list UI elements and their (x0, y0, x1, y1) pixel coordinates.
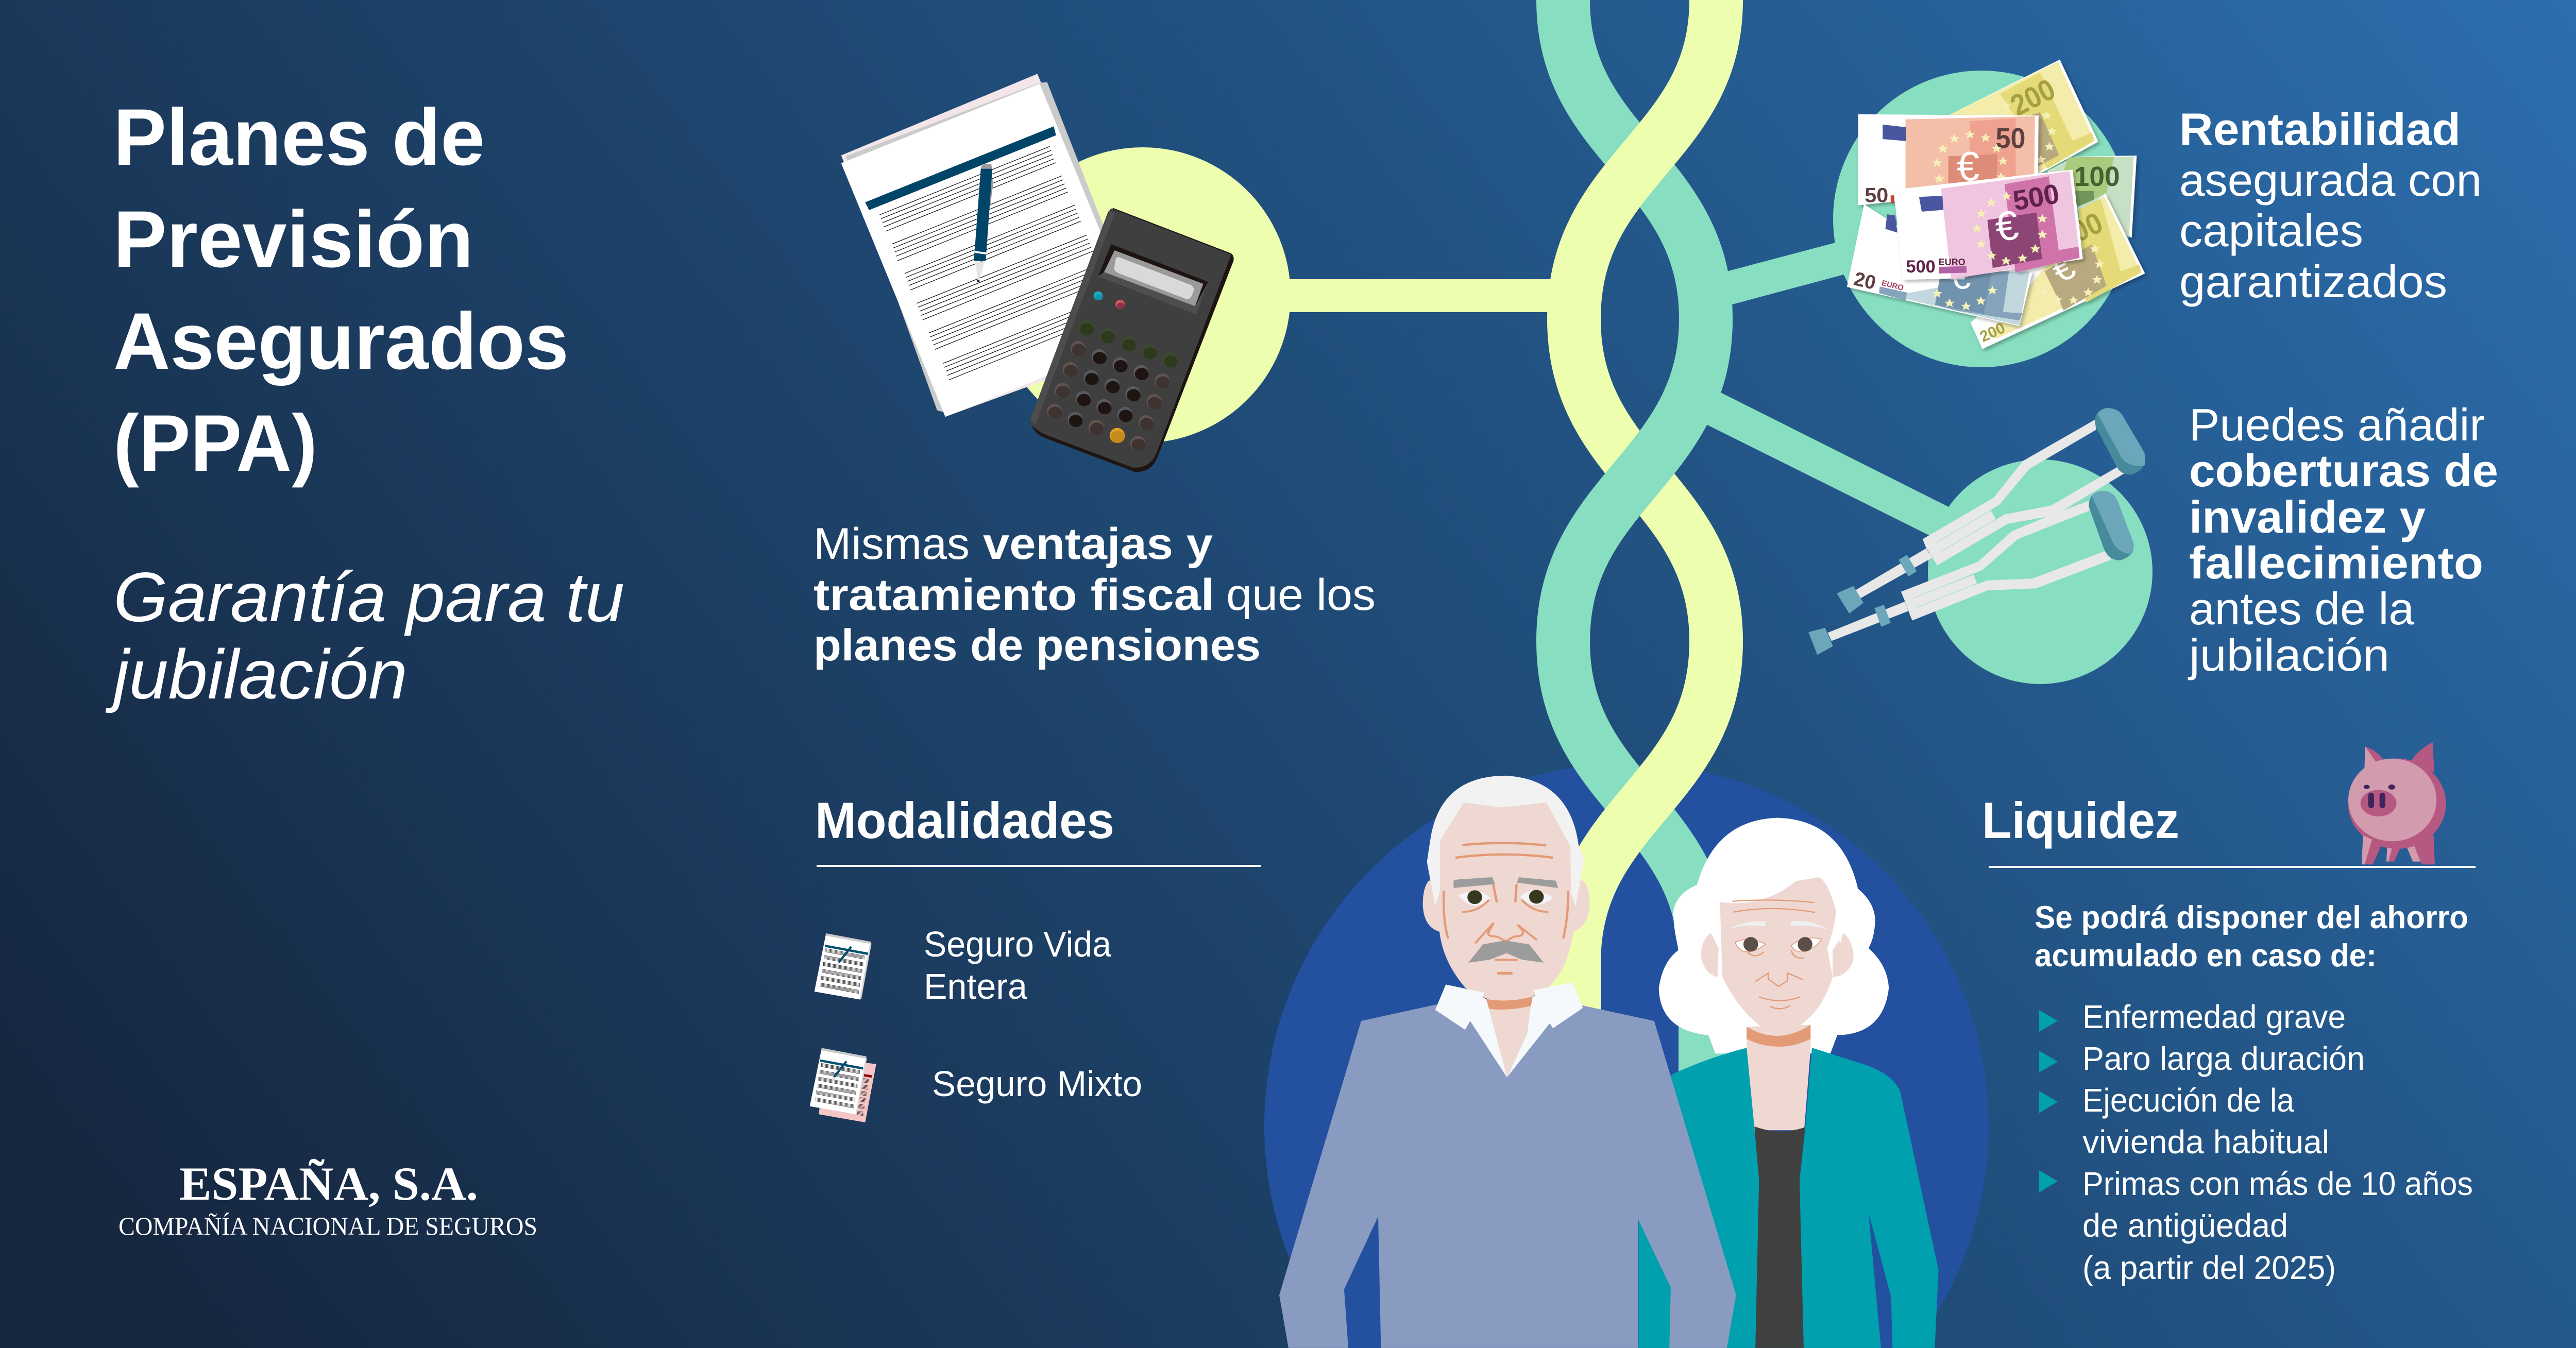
banknote 500: EURO (1939, 257, 1965, 267)
banknote 20: 20 (1852, 268, 1878, 294)
text block: ventajas fiscales: Mismas (814, 519, 970, 569)
text block: rentabilidad: Rentabilidad (2179, 104, 2461, 155)
banknote 100 (2047, 156, 2137, 238)
helix ribbons (1563, 0, 1716, 1185)
woman (1638, 818, 1939, 1348)
text block: ventajas fiscales: tratamiento fiscal (814, 570, 1214, 620)
text block: condiciones liquidez (2035, 900, 2468, 974)
banknote 100: 100 (2074, 161, 2120, 192)
list: causas de liquidez: Ejecución de la (2082, 1082, 2294, 1119)
text block: rentabilidad: garantizados (2179, 256, 2447, 307)
label: seguro mixto: Seguro Mixto (932, 1064, 1142, 1104)
banknote 50: 50 (1865, 184, 1888, 207)
text block: condiciones liquidez: acumulado en caso de: (2035, 938, 2377, 974)
subtitle: Garantía para tu (113, 558, 624, 636)
list: causas de liquidez: vivienda habitual (2082, 1123, 2329, 1161)
banknote 200 front: € (2045, 245, 2081, 291)
subtitle (105, 558, 624, 713)
illustration: euro banknotes (1847, 60, 2145, 349)
text block: ventajas fiscales: planes de pensiones (814, 621, 1261, 670)
pen (974, 164, 993, 282)
yellow circle behind document (995, 147, 1291, 443)
title: Planes de (113, 93, 485, 182)
title (113, 93, 569, 488)
text block: coberturas: Puedes añadir (2189, 399, 2485, 450)
text block: ventajas fiscales: que los (1226, 570, 1376, 620)
banknote 20: € (1951, 256, 1971, 297)
text block: rentabilidad (2179, 104, 2482, 307)
list: causas de liquidez: Enfermedad grave (2082, 998, 2346, 1035)
teal branch connector to crutches (1700, 382, 1953, 537)
label: seguro vida entera: Entera (924, 966, 1027, 1006)
teal circle behind crutches (1928, 459, 2153, 684)
banknote 50: € (1957, 143, 1979, 189)
text block: coberturas (2188, 399, 2498, 680)
heading: modalidades: Modalidades (815, 792, 1114, 849)
text block: coberturas: fallecimiento (2189, 537, 2483, 588)
text block: ventajas fiscales (814, 519, 1376, 670)
divider modalidades (817, 865, 1261, 867)
banknote 200 front (1971, 193, 2145, 349)
teal branch connector to money (1721, 242, 1850, 308)
banknote 200 front: 200 (1977, 319, 2008, 346)
illustration: crutches (1808, 408, 2145, 655)
text block: coberturas: coberturas de (2189, 445, 2498, 496)
logo (118, 1157, 537, 1240)
illustration: elderly couple (1279, 776, 1939, 1348)
banknote 200 back: 200 (2005, 72, 2061, 123)
banknote 20: EURO (1880, 279, 1905, 293)
banknote 500: € (1993, 202, 2021, 250)
teal circle behind banknotes (1833, 71, 2130, 367)
banknote 500 (1894, 169, 2083, 280)
text block: condiciones liquidez: Se podrá disponer del ahorro (2035, 900, 2468, 935)
banknote 50 (1858, 114, 2039, 207)
banknote 200 front: 200 (2053, 206, 2108, 255)
label: seguro vida entera (924, 924, 1111, 1006)
banknote 500: 500 (1906, 257, 1936, 277)
illustration: document and calculator (841, 74, 1234, 472)
icon: single document (815, 933, 872, 1000)
text block: coberturas: invalidez y (2189, 491, 2426, 542)
list: causas de liquidez: Paro larga duración (2082, 1040, 2365, 1077)
crutch two (1808, 491, 2133, 655)
banknote 200 back (1938, 60, 2098, 175)
list: causas de liquidez (2039, 998, 2473, 1286)
text block: ventajas fiscales: ventajas y (983, 519, 1213, 569)
title: Asegurados (113, 297, 569, 386)
banknote 20 (1847, 204, 2032, 326)
yellow branch connector (1262, 279, 1556, 312)
banknote 50: 50 (1996, 122, 2026, 154)
title: (PPA) (113, 399, 317, 488)
text block: rentabilidad: asegurada con (2179, 155, 2482, 206)
text block: rentabilidad: capitales (2179, 205, 2363, 256)
logo: ESPAÑA, S.A. (179, 1157, 478, 1210)
calculator (1030, 208, 1234, 472)
text block: coberturas: jubilación (2188, 629, 2389, 680)
text block: coberturas: antes de la (2189, 583, 2414, 634)
list: causas de liquidez: de antigüedad (2082, 1207, 2288, 1244)
title: Previsión (113, 195, 473, 284)
label: seguro vida entera: Seguro Vida (924, 924, 1111, 964)
heading: liquidez: Liquidez (1982, 792, 2179, 849)
blue circle behind couple (1264, 764, 1989, 1348)
divider liquidez (1989, 866, 2476, 868)
icon: piggy bank (2348, 742, 2446, 864)
banknote 500: 500 (2011, 178, 2062, 217)
icon: double document (810, 1048, 876, 1122)
crutch one (1837, 408, 2145, 613)
logo: COMPAÑÍA NACIONAL DE SEGUROS (118, 1212, 537, 1240)
man (1279, 776, 1736, 1348)
subtitle: jubilación (105, 635, 408, 713)
list: causas de liquidez: Primas con más de 10 años (2082, 1165, 2473, 1202)
list: causas de liquidez: (a partir del 2025) (2082, 1249, 2336, 1286)
document stack (841, 74, 1144, 417)
